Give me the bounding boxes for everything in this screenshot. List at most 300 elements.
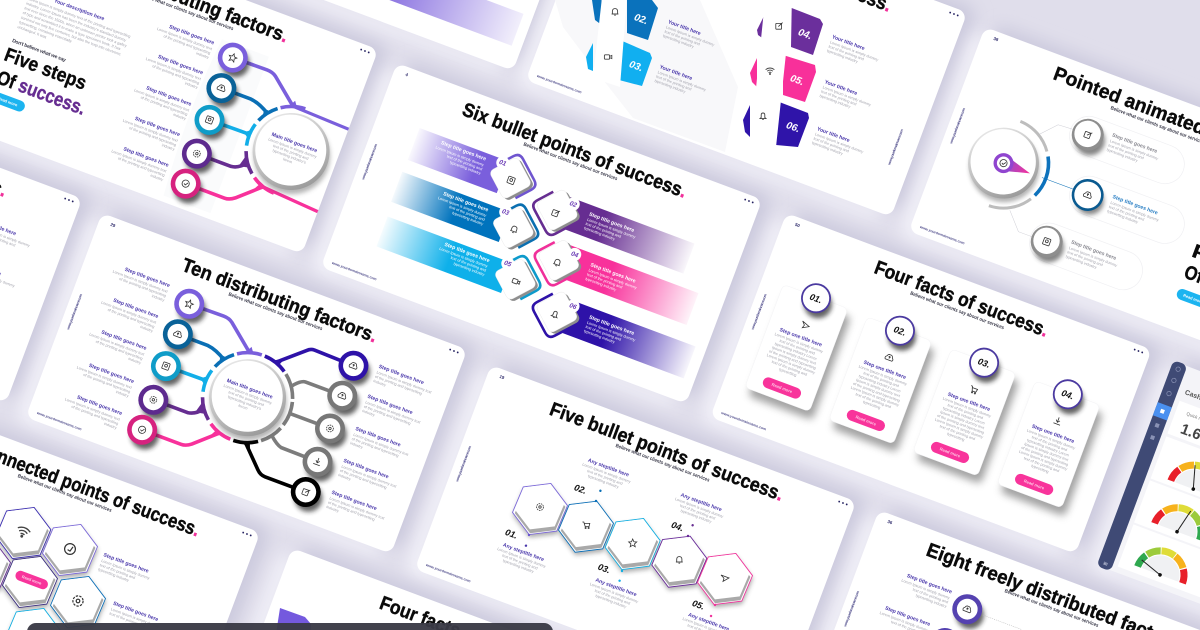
title: Ten distributing factors.: [179, 254, 380, 347]
card 03: 03.: [976, 356, 992, 370]
diagram: left nodes: [122, 284, 275, 477]
tile numbers: [627, 12, 813, 135]
step 04 text: [665, 491, 726, 545]
diagram: five nodes into main circle: text of the printing and: [272, 144, 309, 161]
subtitle: Believe what our clients say about our services: [227, 292, 323, 332]
step 05 text: [680, 597, 739, 630]
left step labels: of the printing and typesetting: [95, 340, 143, 361]
step labels: industry: [184, 81, 198, 90]
card 01: Ipsum is simply dummy text: [771, 346, 817, 366]
menu dots: [242, 531, 252, 537]
tile numbers: 06.: [784, 120, 801, 135]
bullet 05: text of the printing and: [450, 256, 487, 273]
right step labels: industry: [373, 379, 387, 387]
tile labels: Lorem Ipsum is simply dummy: [829, 40, 879, 62]
text block: five steps: industry. Lorem Ipsum has been the industry's standard dummy: [25, 1, 127, 43]
footer url: www.yourdomainname.com: [918, 225, 965, 245]
step 03 text: text of the printing and: [594, 589, 631, 606]
text block: five steps: unchanged. It was: [17, 25, 47, 39]
bullet 05: Step title goes here: [443, 242, 491, 264]
title: Six bullet points of success.: [459, 99, 690, 203]
left step labels: Lorem Ipsum is simply dummy text: [76, 366, 133, 390]
tile labels: typesetting industry: [654, 79, 686, 94]
card 04: text of the printing and: [1031, 435, 1068, 452]
card 01: Lorem Ipsum is simply dummy: [766, 353, 816, 375]
card 02: Read more: [855, 414, 878, 427]
bullet 01: typesetting industry: [449, 160, 481, 176]
card 04: typesetting industry Lorem: [1026, 438, 1069, 458]
bullet 06: [522, 279, 699, 388]
tile labels: typesetting industry: [811, 141, 843, 156]
card 04: Lorem Ipsum is simply dummy: [1026, 429, 1076, 450]
right step labels: Lorem Ipsum is simply dummy text: [329, 496, 386, 521]
tile labels: text of the printing and: [820, 90, 857, 106]
step 2: Step title goes here: [112, 601, 159, 623]
panel: dashboard slide: [1096, 360, 1200, 630]
pills: [1024, 111, 1200, 303]
tile labels: Lorem Ipsum is simply dummy: [814, 132, 864, 154]
tile labels: typesetting industry: [819, 94, 851, 109]
vertical url: www.yourdomainname.com: [455, 445, 472, 483]
right step labels: industry: [338, 473, 351, 481]
step labels: Step title goes here: [134, 116, 181, 138]
sidebar: 30: [1102, 560, 1109, 567]
step labels: Lorem Ipsum is simply dummy text: [133, 88, 191, 113]
bullet 01: [406, 117, 546, 212]
title: Four facts of success.: [871, 257, 1051, 342]
card 03: text of the printing and: [939, 424, 976, 441]
card 03: typesetting industry Lorem: [942, 406, 985, 426]
right step labels: of the printing and typesetting: [327, 501, 375, 522]
right step labels: Step title goes here: [342, 458, 390, 480]
card 04: Lorem Ipsum is simply dummy: [1018, 450, 1068, 471]
bullet 02: typesetting industry: [583, 226, 616, 241]
step 01 text: text of the printing and: [502, 554, 538, 571]
panel: six bullet points slide: [321, 63, 762, 404]
step labels: Lorem Ipsum is simply dummy text: [111, 149, 168, 174]
step 03 text: Any steptitle here: [594, 577, 637, 598]
card 01: Lorem Ipsum is simply dummy: [774, 332, 824, 354]
subtitle: Believe what our clients say about our services: [909, 291, 1005, 331]
card 03: text of the printing and: [947, 403, 984, 420]
step 1: Lorem Ipsum is simply dummy: [901, 578, 950, 600]
footer url: www.yourdomainname.com: [535, 74, 582, 94]
dashed connector: [983, 615, 1021, 629]
page number: 29: [110, 222, 117, 228]
right step labels: [326, 364, 435, 529]
right step labels: of the printing and typesetting: [351, 437, 399, 458]
step labels: of the printing and typesetting: [140, 96, 188, 117]
bullet 04: text of the printing and: [586, 273, 623, 289]
bullet 05: 05: [503, 260, 513, 269]
bullet 06: typesetting industry: [583, 329, 615, 344]
card 04: of the printing and typesetting: [1021, 446, 1069, 467]
tile labels: Lorem Ipsum is simply dummy: [822, 85, 872, 107]
panel: top centre slide: [526, 0, 967, 217]
step labels: Step title goes here: [168, 24, 215, 47]
node 2: Lorem Ipsum is simply dummy: [1110, 201, 1159, 222]
bullet 02: 02: [568, 200, 578, 209]
bullet 03: [389, 159, 549, 261]
page number: 19: [499, 374, 506, 380]
vertical url: www.yourdomainname.com: [843, 590, 860, 628]
vertical url: www.yourdomainname.com: [949, 107, 966, 145]
left step labels: industry: [103, 422, 117, 430]
card 04: 04.: [1060, 388, 1075, 401]
tile labels: [654, 19, 881, 163]
card 03: Step one title here: [947, 392, 991, 413]
step 2: Step title goes here: [884, 606, 931, 628]
bullet 04: 04: [570, 250, 579, 260]
left step labels: of the printing and typesetting: [119, 277, 167, 298]
step 02 text: typesetting industry: [587, 474, 619, 489]
bullet 06: text of the printing and: [585, 325, 621, 342]
step 04 text: 04.: [670, 520, 685, 533]
step labels: of the printing and typesetting: [152, 64, 200, 85]
right step labels: of the printing and typesetting: [339, 469, 387, 490]
button: read more: [1175, 287, 1200, 310]
tile labels: text of the printing and: [664, 30, 700, 46]
footer url: www.yourdomainname.com: [424, 563, 471, 583]
bullet tiles top: [586, 0, 823, 147]
menu dots: [1134, 348, 1143, 354]
right step labels: industry: [326, 505, 340, 513]
card 03: Ipsum is simply dummy text: [940, 410, 986, 430]
step 01 text: 01.: [504, 527, 519, 541]
step 01 text: [494, 526, 554, 577]
step 1: text of the printing and: [99, 563, 136, 580]
step 02 text: 02.: [573, 482, 588, 496]
tile labels: Lorem Ipsum is simply dummy: [665, 25, 715, 47]
left step labels: Step title goes here: [100, 330, 147, 352]
left step labels: Lorem Ipsum is simply dummy text: [112, 270, 169, 294]
panel: top partial slide: [148, 0, 589, 71]
card 03: typesetting: [946, 432, 965, 442]
step 03 text: 03.: [597, 562, 612, 575]
menu dots: [744, 198, 754, 204]
tile labels: Lorem Ipsum is simply dummy: [657, 70, 707, 92]
subtitle: Believe what our clients say about our services: [522, 142, 618, 182]
node 3: typesetting industry: [1065, 255, 1097, 270]
step labels: Lorem Ipsum is simply dummy text: [122, 119, 179, 143]
panel: four facts slide: [710, 213, 1152, 554]
card 01: text of the printing and: [771, 360, 808, 377]
panel: ten distributing factors slide: [26, 213, 467, 554]
node 2: [1066, 174, 1164, 239]
step 01 text: Lorem Ipsum is simply dummy: [497, 547, 546, 569]
node 3: Lorem Ipsum is simply dummy: [1068, 246, 1118, 268]
card 03: Lorem Ipsum is simply dummy: [934, 418, 984, 439]
left step labels: of the printing and typesetting: [83, 373, 131, 394]
step 1: Step title goes here: [102, 552, 149, 575]
bullet 04: typesetting industry: [585, 277, 617, 292]
panel: eight freely distributed slide: [803, 510, 1200, 630]
tile labels: Your title here: [824, 79, 858, 97]
step 02 text: [572, 456, 633, 509]
panel: distributing factors slide: [0, 0, 378, 254]
bullet 03: Lorem Ipsum is simply dummy: [437, 196, 487, 218]
text block: five steps: typesetting, remaining essentially: [18, 20, 72, 44]
node 3: text of the printing and: [1067, 250, 1103, 267]
right step labels: Step title goes here: [366, 394, 413, 416]
right step labels: of the printing and typesetting: [374, 375, 422, 396]
tile labels: typesetting industry: [662, 34, 694, 49]
main circle: [197, 348, 299, 451]
bullet 03: 03: [501, 208, 510, 217]
vertical url: www.yourdomainname.com: [361, 143, 378, 181]
pale backdrop: [160, 38, 269, 213]
vertical url: www.yourdomainname.com: [887, 129, 904, 166]
card 03: Lorem Ipsum is simply dummy: [942, 397, 992, 418]
tile labels: Your title here: [831, 34, 866, 52]
diagram: five nodes into main circle: typesetting industry's: [272, 149, 307, 165]
bullet 02: [522, 177, 698, 286]
card 01: of the printing and typesetting: [768, 349, 816, 370]
text block: five steps: Don't believe what we say: [11, 38, 67, 64]
right step labels: industry: [349, 441, 363, 450]
bullet 05: Lorem Ipsum is simply dummy: [439, 247, 488, 268]
bullet 06: Lorem Ipsum is simply dummy: [586, 321, 636, 342]
bullet 03: Step title goes here: [442, 191, 489, 214]
footer url: www.yourdomainname.com: [35, 411, 82, 431]
diagram: five nodes into main circle: Lorem Ipsum is simply dummy: [268, 137, 317, 159]
left step labels: Step title goes here: [124, 267, 171, 289]
node 2: Step title goes here: [1112, 194, 1159, 217]
bullet 04: Step title goes here: [589, 262, 636, 285]
step 04 text: text of the printing and: [679, 504, 716, 521]
left step labels: Lorem Ipsum is simply dummy text: [100, 301, 158, 325]
page number: 50: [794, 222, 801, 228]
node 3: [1025, 221, 1122, 286]
step 2: [871, 604, 968, 630]
footer url: www.yourdomainname.com: [330, 261, 377, 281]
side heading: [1181, 240, 1200, 314]
card 04: typesetting: [1031, 464, 1049, 474]
panel: pointed animated slide: [909, 27, 1200, 368]
panel: five bullet points slide: [415, 365, 856, 630]
text block: five steps: survived not only five centuries, but also the leap into electronic: [20, 16, 121, 57]
tile numbers: 03.: [627, 59, 644, 74]
right step labels: Step title goes here: [354, 426, 401, 449]
step labels: industry: [173, 113, 187, 121]
left step labels: industry: [115, 390, 129, 398]
card 02: of the printing and typesetting: [852, 382, 900, 403]
browser toolbar strip: [27, 623, 553, 630]
left step labels: industry: [140, 325, 154, 333]
node 1: text of the printing and: [1108, 143, 1144, 160]
tile numbers: 04.: [796, 27, 813, 42]
purple tile: [275, 608, 311, 630]
step 1: typesetting industry: [97, 567, 130, 583]
step 1: typesetting industry: [915, 594, 947, 609]
step labels: of the printing and typesetting: [163, 34, 211, 55]
card 02: text of the printing and: [855, 392, 892, 409]
page number: 38: [993, 36, 1000, 42]
panel: four facts bottom slide: [216, 548, 657, 630]
faint backdrop hexagon: [555, 0, 738, 152]
left step labels: industry: [128, 357, 142, 365]
panel: left partial slide: [0, 62, 82, 403]
vertical url: www.yourdomainname.com: [66, 293, 83, 331]
card 04: Read more: [1023, 478, 1046, 491]
gauge 2: [1134, 480, 1200, 593]
panel: connected points slide: [0, 396, 260, 630]
hexagon chain: [510, 482, 756, 609]
left step labels: industry: [151, 294, 165, 302]
card 01: Step one title here: [779, 327, 823, 349]
node 3: Step title goes here: [1070, 239, 1117, 262]
central circle: [955, 109, 1061, 221]
text block: [0, 220, 33, 288]
tile labels: typesetting industry: [826, 49, 858, 64]
bullet 02: Lorem Ipsum is simply dummy: [587, 218, 636, 239]
bullet 01: Step title goes here: [440, 140, 487, 163]
text block: five steps: Five steps: [1, 44, 90, 95]
gauge 3: [1118, 524, 1200, 630]
step 04 text: typesetting industry: [680, 509, 712, 524]
footer url: www.yourdomainname.com: [720, 411, 767, 431]
step labels: of the printing and typesetting: [117, 156, 165, 178]
step 2: Lorem Ipsum is simply dummy: [110, 607, 160, 629]
right step labels: Step title goes here: [331, 490, 378, 512]
tile labels: text of the printing and: [813, 137, 849, 153]
step 02 text: text of the printing and: [587, 469, 623, 486]
hexagon cluster: [0, 506, 109, 630]
bullet 05: [374, 204, 551, 313]
main circle: lorem: [238, 404, 248, 411]
tile numbers: 02.: [632, 12, 649, 27]
tile labels: text of the printing and: [655, 75, 692, 91]
step 1: Lorem Ipsum is simply dummy: [101, 559, 150, 581]
step 2: [109, 601, 162, 630]
left step labels: Lorem Ipsum is simply dummy text: [64, 397, 121, 422]
text block: five steps: [0, 0, 134, 126]
bullet 03: text of the printing and: [449, 205, 485, 222]
step 04 text: Lorem Ipsum is simply dummy: [674, 497, 724, 519]
diagram: five nodes into main circle: lorem: [282, 157, 293, 164]
button: read more: Read more: [21, 574, 43, 586]
left step labels: Lorem Ipsum is simply dummy text: [89, 332, 146, 357]
bullet 06: Step title goes here: [588, 315, 635, 337]
diagram: five nodes into main circle: Main title goes here: [271, 132, 318, 154]
right step labels: Step title goes here: [378, 364, 425, 386]
step labels: Lorem Ipsum is simply dummy text: [145, 57, 202, 81]
node 1: typesetting industry: [1106, 148, 1138, 163]
step labels: Step title goes here: [157, 54, 204, 76]
card 02: Lorem Ipsum is simply dummy: [850, 386, 900, 407]
tile numbers: 05.: [788, 73, 805, 88]
left step labels: [61, 263, 172, 431]
card 02: typesetting: [862, 400, 881, 410]
card 03: Read more: [939, 446, 962, 459]
card 02: typesetting industry Lorem: [858, 374, 901, 394]
tile labels: Your title here: [659, 64, 693, 82]
bullet 04: [524, 228, 701, 337]
card 01: 01.: [808, 292, 824, 305]
step 03 text: typesetting industry: [595, 594, 627, 609]
step labels: of the printing and typesetting: [129, 126, 177, 147]
step 1: text of the printing and: [912, 588, 949, 604]
card 01: [742, 272, 858, 420]
left step labels: of the printing and typesetting: [71, 405, 119, 426]
quick ratio card: [1167, 401, 1200, 504]
step 01 text: typesetting industry: [502, 559, 534, 574]
step 03 text: Lorem Ipsum is simply dummy: [589, 582, 639, 604]
step 02 text: Lorem Ipsum is simply dummy: [582, 462, 631, 484]
bullet 05: typesetting industry: [453, 262, 485, 277]
step labels: Step title goes here: [122, 146, 169, 169]
card 02: Lorem Ipsum is simply dummy: [858, 365, 907, 386]
right step labels: Lorem Ipsum is simply dummy text: [365, 400, 422, 425]
step 2: text of the printing and: [109, 612, 145, 628]
sidebar: [1096, 360, 1188, 571]
card 03: [911, 336, 1026, 484]
tile labels: Your title here: [816, 126, 851, 144]
node 1: [1066, 114, 1163, 179]
node 1: Step title goes here: [1111, 133, 1158, 155]
card 04: [995, 368, 1111, 517]
node 1: Lorem Ipsum is simply dummy: [1109, 139, 1159, 161]
step labels: industry: [195, 51, 209, 60]
step 04 text: Any steptitle here: [680, 492, 723, 513]
step labels: Lorem Ipsum is simply dummy text: [156, 27, 213, 51]
card 04: Ipsum is simply dummy text: [1024, 442, 1070, 462]
step 05 text: 05.: [691, 598, 706, 612]
subtitle: Believe what our clients say about our services: [615, 443, 711, 484]
button: read more: [0, 90, 26, 113]
step labels: industry: [161, 143, 175, 152]
menu dots: [949, 11, 959, 17]
diagram: five nodes into main circle: [165, 38, 363, 248]
menu dots: [449, 348, 459, 354]
bullet 01: Lorem Ipsum is simply dummy: [435, 145, 484, 167]
diagram: right nodes: [219, 321, 376, 516]
bullet 01: text of the printing and: [446, 155, 483, 171]
node 2: text of the printing and: [1108, 205, 1145, 222]
card 02: [826, 304, 942, 453]
card 01: text of the printing and: [779, 339, 815, 356]
step labels: industry: [150, 174, 164, 182]
bullet 04: Lorem Ipsum is simply dummy: [588, 268, 637, 290]
card 02: Step one title here: [863, 360, 907, 381]
step 1: [97, 552, 153, 589]
main circle: Main title goes here: [226, 378, 273, 401]
card 02: text of the printing and: [863, 371, 899, 388]
gauge 1: [1151, 436, 1200, 549]
tile labels: text of the printing and: [828, 45, 864, 61]
page number: 4: [405, 72, 409, 78]
step 1: [894, 570, 990, 630]
step labels: Step title goes here: [145, 85, 192, 108]
bullet 03: typesetting industry: [452, 211, 484, 226]
bullet 02: Step title goes here: [588, 212, 635, 234]
step labels: [108, 20, 216, 182]
card 01: typesetting: [778, 367, 797, 378]
main circle: typesetting industry's: [227, 395, 262, 411]
card 02: 02.: [892, 324, 907, 338]
subtitle: Believe what our clients say about our services: [17, 473, 113, 514]
step 1: Step title goes here: [906, 573, 953, 596]
right step labels: Lorem Ipsum is simply dummy text: [376, 370, 433, 395]
right step labels: industry: [361, 409, 375, 417]
title: Five bullet points of success.: [547, 398, 787, 506]
card 04: text of the printing and: [1023, 456, 1060, 473]
vertical url: www.yourdomainname.com: [750, 293, 768, 331]
card 02: Ipsum is simply dummy text: [855, 378, 901, 398]
card 01: typesetting industry Lorem: [774, 342, 817, 361]
card 04: Step one title here: [1031, 424, 1075, 445]
page number: 36: [887, 519, 894, 525]
